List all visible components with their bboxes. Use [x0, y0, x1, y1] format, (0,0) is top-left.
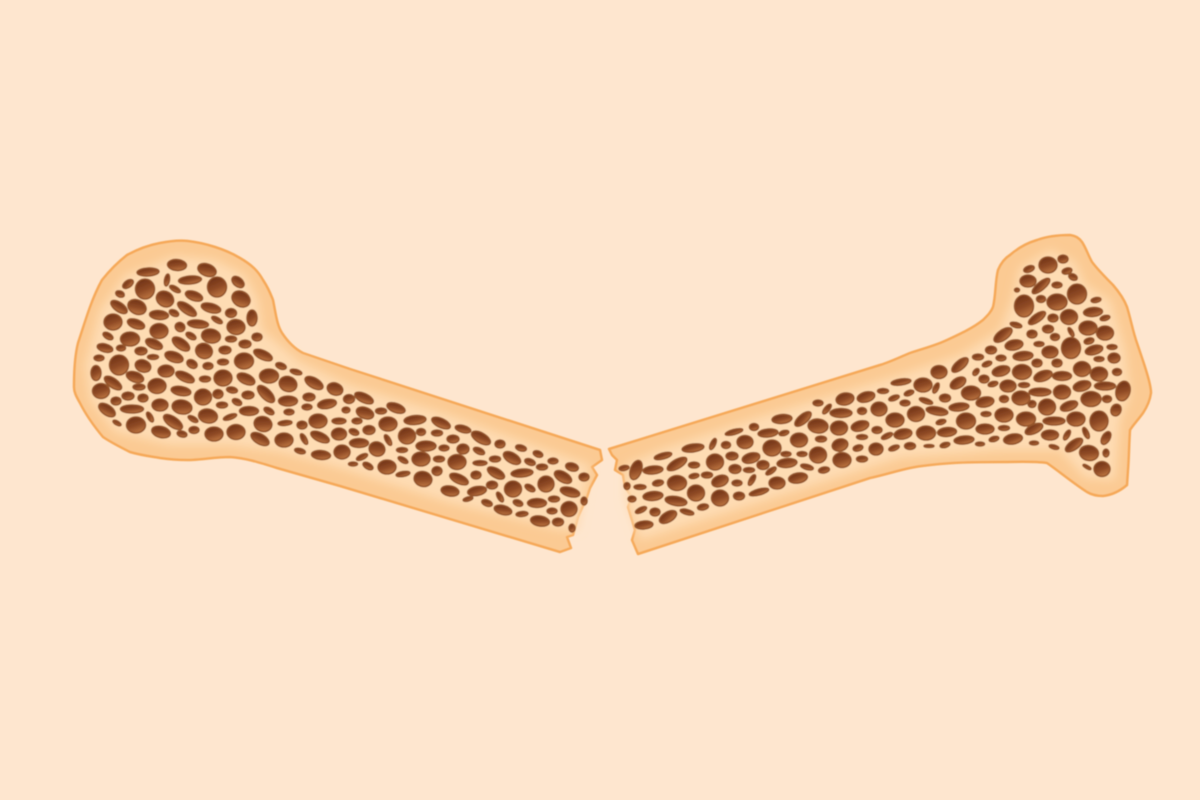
right bone pores	[619, 255, 1132, 530]
left bone fragment	[74, 241, 602, 552]
left bone spongy interior	[85, 256, 590, 530]
right bone outer shell	[609, 235, 1151, 554]
left bone pores	[91, 259, 589, 532]
left bone outer shell	[74, 241, 602, 552]
right bone fragment	[609, 235, 1151, 554]
right bone spongy interior	[625, 250, 1130, 540]
